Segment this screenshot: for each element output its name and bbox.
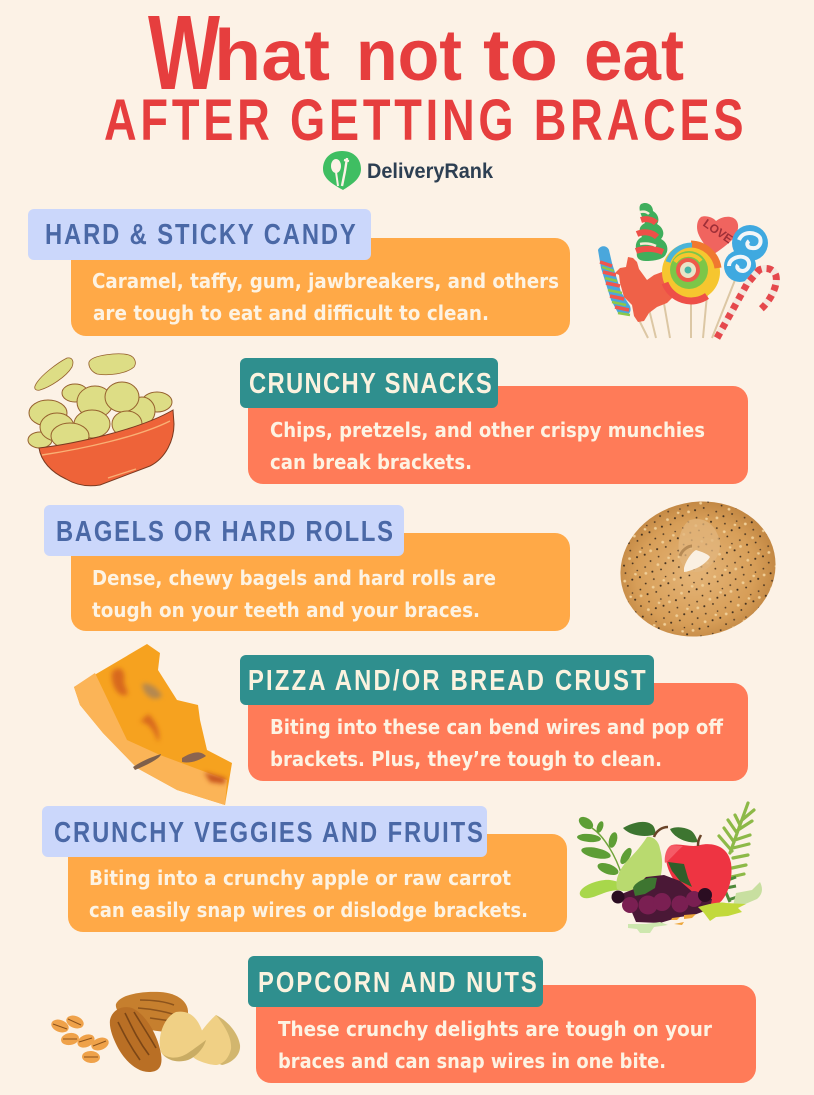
icon: lollipops and candy cane	[598, 203, 776, 338]
icon: bowl of chips	[28, 354, 174, 486]
subtitle: after getting braces: AFTER GETTING BRACES	[104, 89, 744, 153]
text block: snacks description: can break brackets.	[270, 450, 472, 474]
icon: green leaf with fork and spoon	[323, 151, 361, 190]
title: What not to eat: to	[483, 16, 558, 96]
heading: crunchy snacks: CRUNCHY SNACKS	[249, 367, 492, 400]
icon: pizza crust slice	[74, 644, 232, 805]
icon: nuts and seeds	[49, 992, 240, 1072]
text block: pizza description: brackets. Plus, they’re tough to clean.	[270, 747, 662, 771]
icon: lollipops and candy cane: LOVE	[700, 216, 735, 246]
heading: pizza and bread crust: PIZZA AND/OR BREAD CRUST	[248, 664, 646, 697]
text block: pizza description: Biting into these can bend wires and pop off	[270, 715, 724, 739]
text block: pizza description	[248, 683, 748, 781]
text block: snacks description	[248, 386, 748, 484]
heading: bagels or hard rolls: BAGELS OR HARD ROLLS	[56, 515, 393, 548]
heading: bagels or hard rolls	[44, 505, 404, 556]
text block: candy description: Caramel, taffy, gum, jawbreakers, and others	[92, 269, 559, 293]
panel: hard and sticky candy	[28, 209, 570, 336]
title: What not to eat: not	[356, 16, 462, 96]
icon: poppy seed bagel	[608, 487, 788, 651]
icon: apple, pear and grapes	[577, 803, 762, 933]
title: What not to eat: hat	[214, 16, 330, 96]
text block: nuts description: These crunchy delights are tough on your	[278, 1017, 712, 1041]
text block: veggies description: Biting into a crunchy apple or raw carrot	[89, 866, 511, 890]
title: What not to eat: eat	[584, 16, 684, 96]
panel: pizza and bread crust	[240, 655, 748, 781]
heading: popcorn and nuts: POPCORN AND NUTS	[258, 966, 537, 999]
title: What not to eat	[148, 0, 684, 112]
logo: DeliveryRank	[323, 151, 493, 190]
heading: crunchy snacks	[240, 358, 498, 408]
heading: crunchy veggies and fruits	[42, 806, 487, 857]
heading: crunchy veggies and fruits: CRUNCHY VEGGIES AND FRUITS	[54, 816, 483, 849]
text block: bagels description: Dense, chewy bagels and hard rolls are	[92, 566, 496, 590]
text block: candy description	[71, 238, 570, 336]
logo: DeliveryRank: DeliveryRank	[367, 160, 493, 183]
heading: hard and sticky candy: HARD & STICKY CANDY	[45, 218, 356, 251]
text block: nuts description	[256, 985, 756, 1083]
heading: pizza and bread crust	[240, 655, 654, 705]
text block: snacks description: Chips, pretzels, and other crispy munchies	[270, 418, 705, 442]
text block: bagels description	[71, 533, 570, 631]
panel: bagels or hard rolls	[44, 505, 570, 631]
text block: veggies description	[68, 834, 567, 932]
heading: popcorn and nuts	[248, 956, 543, 1007]
text block: bagels description: tough on your teeth and your braces.	[92, 598, 480, 622]
panel: crunchy veggies and fruits	[42, 806, 567, 932]
text block: nuts description: braces and can snap wires in one bite.	[278, 1049, 666, 1073]
panel: popcorn and nuts	[248, 956, 756, 1083]
text block: candy description: are tough to eat and difficult to clean.	[93, 301, 489, 325]
text block: veggies description: can easily snap wires or dislodge brackets.	[89, 898, 528, 922]
panel: crunchy snacks	[240, 358, 748, 484]
heading: hard and sticky candy	[28, 209, 371, 260]
